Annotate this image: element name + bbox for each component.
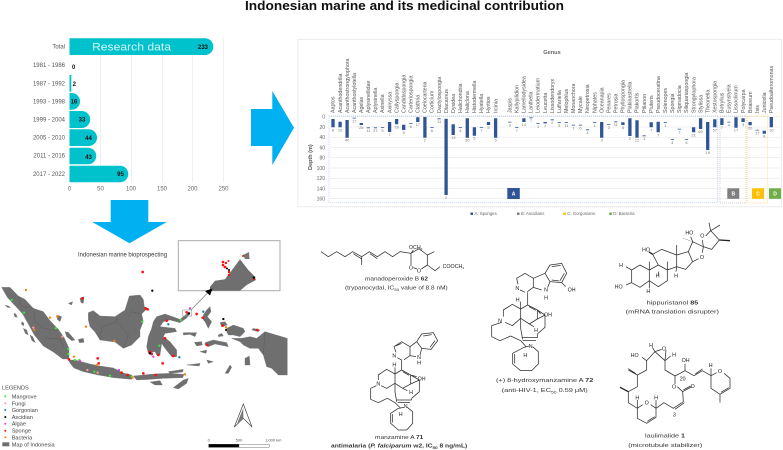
caption: manzamine activity: 8 ng/mL) (438, 444, 467, 450)
sample counts: 1 (664, 123, 667, 128)
molecule: manzamine A: H (417, 360, 421, 366)
genus names: Jaspis (508, 98, 514, 113)
sample counts: 5 (487, 125, 490, 130)
sample counts: 25 (359, 125, 364, 130)
molecule: laulimalide: H (649, 343, 653, 349)
genus names: Lanthella (529, 91, 535, 113)
group outline: ascidians (720, 116, 746, 203)
genus names: Strongylophora (691, 77, 697, 113)
chart title: Genus (543, 50, 561, 56)
sample counts: 20 (748, 125, 753, 130)
chart legend: A: Sponges (474, 211, 497, 216)
sample counts: 2 (551, 120, 554, 125)
panel: map of Indonesia (2, 271, 287, 389)
molecule: laulimalide: OH (682, 358, 690, 364)
sample counts: 57 (713, 127, 718, 132)
molecule: laulimalide (620, 343, 730, 423)
genus names: Pseudoceratina (656, 76, 662, 113)
map inset box (178, 241, 280, 291)
genus names: Hyatella (479, 94, 485, 113)
molecule: 8-hydroxymanzamine A: N (544, 288, 548, 294)
genus names: Phyllospongia (621, 80, 627, 113)
molecule: 8-hydroxymanzamine A: H (516, 297, 520, 303)
legend heading: LEGENDS (2, 386, 29, 392)
sample counts: 3 (608, 125, 611, 130)
molecule: laulimalide: H (709, 363, 713, 369)
caption: manadoperoxide B: manadoperoxide B 62 (365, 276, 428, 282)
molecule: manzamine A: H (399, 412, 403, 418)
genus names: Luffariella (557, 90, 563, 113)
landmasses (2, 287, 287, 389)
molecule: hippuristanol: HO (685, 230, 693, 236)
sample counts: 4 (728, 122, 731, 128)
sample counts: 11 (614, 122, 619, 127)
molecule: manadoperoxide B: 3 (421, 247, 423, 251)
category labels: 2005 - 2010 (33, 136, 66, 142)
genus names: Agelas (359, 96, 365, 113)
genus names: Ircinia (493, 99, 499, 113)
category tag D: D (773, 192, 777, 198)
sample counts: 1 (593, 123, 596, 128)
genus names: Junicella (762, 92, 768, 113)
map legend: Algae (12, 422, 26, 428)
sample counts: 8 (622, 125, 625, 130)
caption: 8-hydroxymanzamine activity: (anti-HIV-1, EC (502, 388, 539, 394)
map legend (2, 386, 56, 448)
genus names: Histodermella (472, 81, 478, 113)
caption: manadoperoxide activity: (trypanocydal, IC (345, 286, 387, 292)
bar heading: research data: Research data (92, 42, 172, 54)
depth axis labels: 60 (319, 145, 325, 151)
caption: 8-hydroxymanzamine A: (+) 8-hydroxymanzamine A 72 (496, 378, 593, 384)
molecule: hippuristanol: H (674, 274, 678, 280)
genus names: Siliquariaspongia (684, 73, 690, 113)
caption: 8-hydroxymanzamine activity: 50 (551, 390, 557, 394)
molecule: laulimalide: 3 (673, 413, 676, 419)
chart legend (470, 211, 635, 216)
depth axis labels: 160 (317, 196, 325, 202)
sample counts: 6 (410, 124, 413, 129)
genus names: Aplysinellidae (366, 81, 372, 113)
sample counts: 4 (459, 128, 462, 133)
molecule: laulimalide: O (662, 347, 666, 353)
sample counts: 11 (564, 123, 569, 128)
sample counts: 7 (657, 132, 660, 137)
map legend: Fungi (12, 401, 26, 407)
depth axis labels: 20 (319, 125, 325, 131)
molecule: manadoperoxide B: O (417, 269, 421, 275)
molecule: hippuristanol: HO (615, 284, 623, 290)
caption: manzamine activity: antimalaria ( P. falciparum w2, IC (331, 444, 429, 450)
genus names: Corticium (430, 90, 436, 113)
map scale bar: 0 (208, 437, 211, 442)
sample counts: 6 (579, 126, 582, 130)
genus names: Candidaspongia (401, 75, 407, 113)
genus names: Carteriospongia (408, 76, 414, 113)
map legend: Bacteria (12, 435, 33, 441)
sample counts: 11 (366, 128, 371, 133)
depth axis labels: 0 (322, 114, 325, 120)
genus names: Callyspongia (394, 83, 400, 113)
genus names: Halichondria (458, 84, 464, 113)
genus names: Mycale (578, 96, 584, 113)
genus names: Briareum (748, 91, 754, 113)
molecule: hippuristanol: H (656, 274, 660, 280)
bar values: 33 (79, 118, 86, 124)
bar values: 2 (73, 82, 77, 88)
genus names: Lamellodysidea (522, 76, 528, 113)
category labels: Total (52, 45, 65, 51)
x axis labels: 200 (187, 186, 198, 192)
depth axis labels: 140 (317, 186, 325, 192)
bar values: 95 (117, 172, 124, 178)
arrow: right to genus chart (251, 91, 294, 165)
genus names: Axinella (380, 94, 386, 113)
sample counts: 12 (635, 138, 640, 143)
genus names: Stylissa (698, 95, 704, 113)
depth axis labels: 100 (317, 166, 325, 172)
category labels: 1999 - 2004 (33, 117, 66, 123)
molecule: hippuristanol: H (646, 289, 650, 295)
caption: 8-hydroxymanzamine activity: 0.59 μM) (557, 388, 588, 394)
group outline: gorgonians (747, 116, 768, 203)
genus names: Pseudoalteromonas (769, 66, 775, 113)
group outline: sponges (329, 116, 718, 203)
molecule: hippuristanol: O (700, 234, 704, 240)
sample counts: 4 (586, 130, 589, 135)
molecule: laulimalide: O (672, 384, 676, 390)
genus names: Coelocarteria (423, 81, 429, 113)
sample counts: 4 (671, 140, 674, 145)
genus names: Theonella (705, 90, 711, 113)
caption: laulimalide activity: (microtubule stabilizer) (628, 443, 702, 449)
sample counts: 6 (685, 140, 688, 145)
category tag D (769, 188, 781, 199)
sample counts: 7 (530, 118, 533, 123)
genus names: Clathria (416, 95, 422, 113)
genus names: Dactylospongia (437, 77, 443, 113)
molecule: laulimalide: H (635, 395, 639, 401)
arrow: down to map (92, 200, 167, 243)
sample counts: 17 (416, 122, 421, 127)
genus names: Petrosia (614, 94, 620, 113)
genus names: Penares (606, 93, 612, 113)
molecule: hippuristanol: H (619, 263, 623, 269)
category tag B: B (731, 192, 735, 198)
genus names: Polycarpa (741, 89, 747, 113)
sample counts: 7 (516, 128, 519, 133)
genus names: Leucetta (543, 93, 549, 113)
bar values (71, 45, 209, 178)
x axis labels: 250 (218, 186, 229, 192)
sample counts: 9 (742, 122, 745, 127)
genus names: Kallypilidion (514, 85, 520, 113)
genus names: Eusynstyela (727, 84, 733, 113)
molecule: hippuristanol (615, 223, 730, 295)
genus names: Plakortis (635, 92, 641, 113)
molecule: laulimalide: H (672, 352, 676, 358)
molecule: laulimalide: O (718, 369, 722, 375)
sample counts: 6 (431, 128, 434, 133)
category labels: 1987 - 1992 (33, 81, 66, 87)
chart legend: D: Bacteria (613, 211, 635, 216)
sample counts: 18 (394, 124, 400, 129)
molecule: manzamine A: N (392, 354, 396, 360)
bar values: 233 (198, 45, 209, 51)
sample counts: 5 (403, 130, 406, 135)
genus names: Acanthostrongylophora (345, 58, 351, 113)
depth range bars (333, 117, 771, 195)
sampling sites (68, 271, 259, 376)
depth axis labels: 120 (317, 176, 325, 182)
molecule: manzamine A: OH (418, 376, 426, 382)
sample counts: 10 (769, 127, 774, 132)
sample counts: 8 (763, 134, 766, 139)
sample counts: 17 (755, 130, 760, 136)
x axis labels: 100 (126, 186, 137, 192)
genus names: Dysidea (451, 94, 457, 113)
molecule: manadoperoxide B: COOCH (443, 264, 462, 270)
sample counts: 17 (352, 118, 357, 124)
category tag B (727, 188, 739, 199)
sample counts: 7 (678, 130, 681, 134)
map scale bar: 1,000 km (265, 437, 282, 442)
sample counts: 19 (705, 150, 711, 155)
x axis labels: 50 (97, 186, 104, 192)
genus names: Acanthodendrilla (338, 73, 344, 113)
genus names: Haliclona (465, 91, 471, 113)
panel: research data bar chart (33, 38, 229, 192)
sample counts: 7 (388, 132, 391, 137)
genus names: Oceanapia (599, 87, 605, 113)
depth axis title: Depth (m) (308, 144, 314, 170)
genus names: Neopetrosia (585, 84, 591, 113)
inset sites (222, 255, 255, 280)
sample counts: 1 (537, 124, 540, 129)
molecule: 8-hydroxymanzamine A: H (534, 328, 538, 334)
category tag A (507, 188, 520, 199)
molecule: 8-hydroxymanzamine A: N (515, 286, 519, 292)
molecule: manzamine A: H (392, 362, 396, 368)
molecule: manadoperoxide B: O (409, 266, 413, 272)
sample counts (332, 118, 774, 200)
map scale bar (208, 437, 282, 447)
inset island (243, 252, 250, 259)
molecule: 8-hydroxymanzamine A: OH (568, 287, 576, 293)
arrow: locator to inset (191, 288, 212, 310)
bar values: 0 (72, 65, 76, 71)
category labels (33, 45, 66, 178)
sample counts: 5 (473, 136, 476, 141)
genus names: Botryllus (720, 92, 726, 113)
genus names: Lissoclinum (734, 85, 740, 113)
genus names: Lissodendoryx (550, 78, 556, 113)
depth axis labels: 40 (319, 135, 325, 141)
molecule: manadoperoxide B (321, 245, 464, 275)
genus names (331, 58, 775, 113)
x axis labels: 0 (68, 186, 72, 192)
sample counts: 3 (601, 138, 604, 143)
depth axis labels: 80 (319, 156, 325, 162)
molecule: 8-hydroxymanzamine A: H (523, 353, 527, 359)
x axis labels (68, 186, 229, 192)
category tag C: C (756, 192, 760, 198)
molecule: laulimalide: HO (631, 353, 639, 359)
genus names: Aaptos (331, 96, 337, 113)
genus names: Sigmadocia (677, 85, 683, 113)
genus names: Ptilanon (642, 94, 648, 113)
molecule: 8-hydroxymanzamine A (492, 263, 576, 371)
bars (70, 38, 213, 182)
sample counts: 7 (650, 127, 653, 132)
molecule: manzamine A: N (404, 404, 408, 410)
molecule: hippuristanol: O (700, 255, 704, 261)
map legend: Sponge (12, 429, 31, 435)
icon: north arrow (234, 404, 252, 427)
map legend: Map of Indonesia (12, 442, 56, 448)
genus names: Axinyssa (387, 92, 393, 113)
molecule: 8-hydroxymanzamine A: OH (544, 313, 552, 319)
sample counts: 7 (544, 123, 547, 128)
inset landmass (210, 259, 256, 291)
genus names: Leiodermatium (536, 77, 542, 113)
category labels: 1993 - 1998 (33, 99, 66, 105)
depth axis labels (317, 114, 325, 202)
genus names: Niphates (592, 92, 598, 113)
category tag A: A (512, 192, 516, 198)
sample counts: 1 (572, 126, 575, 130)
sample counts: 5 (381, 128, 384, 133)
sample counts: 10 (338, 127, 343, 132)
caption: hippuristanol activity: (mRNA translation disrupter) (626, 309, 719, 315)
caption: manadoperoxide activity: value of 8.8 nM) (399, 286, 448, 292)
category labels: 2011 - 2016 (33, 154, 66, 160)
sample counts: 11 (437, 119, 442, 124)
caption: manadoperoxide activity: 50 (394, 288, 399, 292)
molecule: laulimalide: O (691, 384, 695, 390)
molecule: hippuristanol: HO (642, 248, 650, 254)
molecule: manzamine A: H (409, 390, 413, 396)
sample counts: 7 (721, 125, 724, 130)
caption: manzamine A: manzamine A 71 (375, 435, 423, 441)
map heading: Indonesian marine bioprospecting (78, 252, 167, 258)
genus names: Monanchora (571, 84, 577, 113)
map legend: Gorgonian (12, 408, 38, 414)
genus names: Hyrtios (486, 96, 492, 113)
sample counts: 27 (373, 128, 378, 133)
chart legend: C: Gorgonians (567, 211, 595, 216)
panel: genus depth chart (298, 39, 782, 216)
genus names: Pluteris (649, 95, 655, 113)
molecule: laulimalide: H (654, 395, 658, 401)
sample counts: 60 (698, 129, 704, 134)
category labels: 2017 - 2022 (33, 172, 66, 178)
genus names: Diacarnus (444, 89, 450, 113)
sample counts: 3 (509, 122, 512, 128)
bar values: 43 (85, 155, 92, 161)
genus names: Spongia (670, 94, 676, 113)
molecule: 8-hydroxymanzamine A: H (544, 295, 548, 301)
sample counts: 17 (734, 128, 739, 133)
genus names: Acanthostylotella (352, 73, 358, 113)
sample counts: 2 (445, 195, 448, 200)
sample counts: 2 (424, 138, 427, 143)
genus names: Xestospongia (712, 81, 718, 113)
genus names: Melophlus (564, 89, 570, 113)
sample counts: 8 (332, 127, 335, 132)
sample counts: 21 (691, 132, 697, 137)
sample counts: 2 (629, 136, 632, 141)
inset locator box (183, 310, 192, 316)
map legend: Mangrove (12, 394, 37, 400)
sample counts: 14 (522, 122, 527, 127)
sample counts: 5 (494, 138, 497, 143)
category labels: 1981 - 1986 (33, 63, 66, 69)
caption: hippuristanol: hippuristanol 85 (647, 300, 698, 306)
bar values: 44 (85, 136, 92, 142)
genus names: Plakinastrella (628, 81, 634, 113)
molecule: manzamine A: N (376, 381, 380, 387)
molecule: laulimalide: 20 (680, 376, 686, 382)
sample counts: 5 (558, 123, 561, 128)
molecule: manadoperoxide B: 3 (462, 266, 464, 270)
molecule: 8-hydroxymanzamine A: N (498, 318, 502, 324)
sample counts: 40 (345, 138, 350, 143)
genus names: Solenopes (663, 88, 669, 113)
molecule: 8-hydroxymanzamine A: N (529, 344, 533, 350)
x axis labels: 150 (157, 186, 168, 192)
chart legend: B: Ascidians (521, 211, 544, 216)
bar values: 16 (71, 100, 78, 106)
genus names: Aplysinella (373, 88, 379, 113)
molecule: laulimalide: O (645, 401, 649, 407)
map scale bar: 500 (236, 437, 243, 442)
sample counts: 30 (465, 138, 470, 143)
caption: laulimalide: laulimalide 1 (645, 434, 685, 440)
sample counts: 1 (643, 136, 646, 141)
molecule: manzamine A (371, 333, 438, 430)
sample counts: 7 (480, 128, 483, 133)
category tag C (752, 188, 764, 199)
molecule: manadoperoxide B: OCH (409, 245, 421, 251)
genus names: Isis (755, 105, 761, 113)
molecule: manzamine A: N (417, 355, 421, 361)
sample counts: 13 (451, 135, 456, 140)
map legend: Ascidian (12, 415, 33, 421)
